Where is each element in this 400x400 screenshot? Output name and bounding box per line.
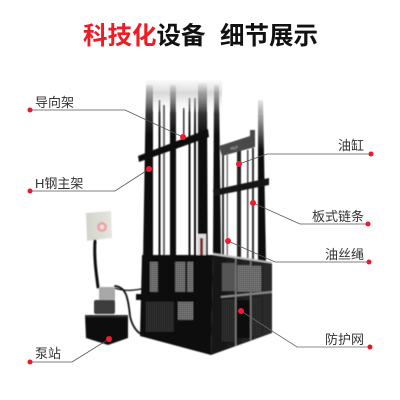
callout: 泵站 [28,336,112,364]
cylinder head [219,130,255,156]
title [83,22,318,50]
callout: 防护网 [238,308,372,350]
mast: left tower posts [143,82,208,345]
control box on mast [197,234,206,264]
cage left face [140,255,213,355]
background haze behind mast top [146,80,222,112]
callout: 防护网: 防护网 [325,332,364,347]
callout: H钢主架: H钢主架 [35,176,83,191]
oil tank [85,315,128,345]
cage right face [211,253,272,355]
callout: 板式链条 [250,200,370,226]
title: 设备 [156,22,206,50]
hydraulic control box [86,211,112,241]
lower crossbar [213,178,269,196]
callout: 导向架 [28,95,186,140]
mast: right tower posts [213,85,266,262]
callout: H钢主架 [28,166,152,194]
upper guide crossbar [138,129,209,162]
title: 科技化 [83,22,156,50]
lift machine [85,80,272,355]
callout: 导向架: 导向架 [35,95,74,110]
motor [94,287,115,314]
callout: 油丝绳: 油丝绳 [325,247,364,262]
lift machine: HLF [230,144,239,151]
callout: 油丝绳 [225,238,372,264]
title: 细节展示 [220,22,318,50]
callout: 板式链条: 板式链条 [312,209,364,224]
callout: 油缸 [236,138,374,167]
callout: 泵站: 泵站 [35,346,61,361]
callout: 油缸: 油缸 [338,138,364,153]
hydraulic hoses [95,241,141,334]
